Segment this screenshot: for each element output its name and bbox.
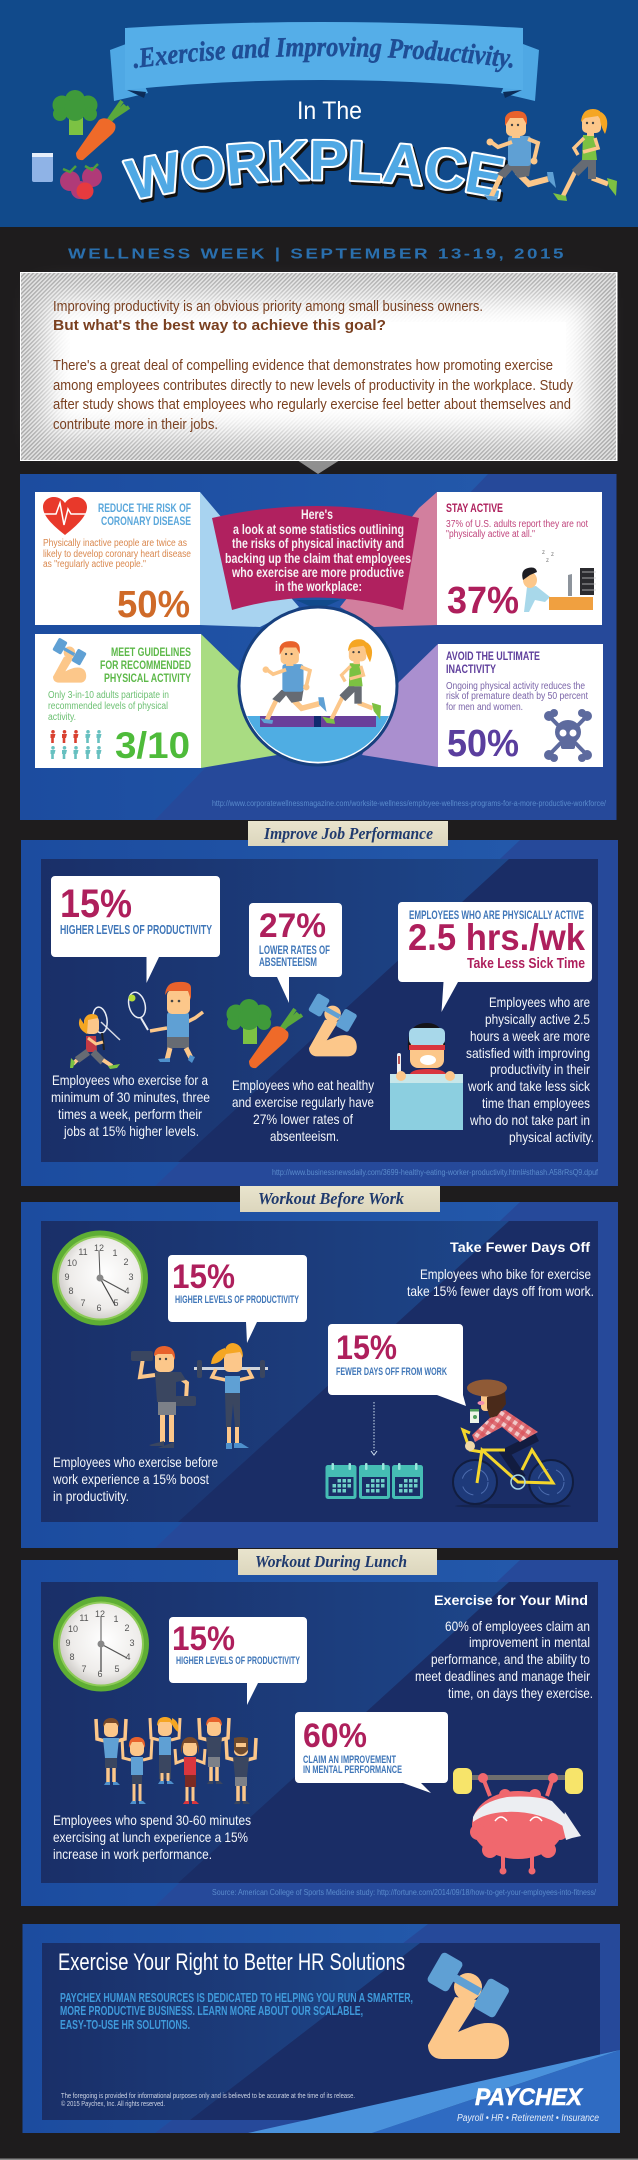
icon: brain lifting barbell — [453, 1768, 583, 1874]
text: bike: take 15% fewer days off from work. — [407, 1283, 594, 1299]
logo: Paychex: PAYCHEX — [475, 2084, 584, 2111]
icon: clock showing 4:30: 12 — [95, 1609, 105, 1619]
icon: berries — [60, 164, 102, 200]
text: during lunch: exercising at lunch experience a 15% — [53, 1829, 248, 1845]
source link: Source: American College of Sports Medicine study: http://fortune.com/2014/09/18/how-to-get-your-employees-into-fitness/ — [212, 1888, 597, 1897]
icon: tired worker at desk — [522, 550, 596, 612]
bubble: 60%: CLAIM AN IMPROVEMENT — [303, 1754, 396, 1766]
icon: clock showing 4:25: 12 — [94, 1243, 104, 1253]
icon: clock showing 4:25: 11 — [78, 1247, 88, 1257]
card: coronary disease: 50% — [117, 584, 190, 626]
intro text — [53, 299, 574, 433]
icon: clock showing 4:25: 5 — [113, 1298, 119, 1308]
card: ultimate inactivity: Ongoing physical activity reduces the — [446, 681, 585, 692]
header band — [0, 0, 638, 227]
bubble: 15% productivity: HIGHER LEVELS OF PRODUCTIVITY — [176, 1655, 300, 1667]
icon: clock showing 4:25: 2 — [123, 1257, 129, 1267]
card: coronary disease: CORONARY DISEASE — [101, 514, 191, 528]
icon: tired worker at desk: z — [542, 550, 545, 556]
banner: here's a look: in the workplace: — [275, 578, 362, 594]
icon: clock showing 4:30: 1 — [113, 1614, 119, 1624]
icon: carrot — [249, 1009, 302, 1068]
card: coronary disease: REDUCE THE RISK OF — [98, 501, 191, 515]
icon: group of six exercisers — [96, 1717, 256, 1804]
text: 27% absenteeism: Employees who eat healthy — [232, 1077, 374, 1093]
card: coronary disease — [35, 492, 200, 626]
card: meet guidelines: activity. — [48, 712, 76, 723]
icon: glass of water — [32, 153, 53, 182]
bubble: 27%: 27% — [259, 907, 326, 945]
card: ultimate inactivity: for men and women. — [446, 702, 523, 713]
text: before work: in productivity. — [53, 1488, 129, 1504]
text: during lunch — [53, 1812, 251, 1862]
text: sick time — [466, 994, 594, 1145]
panel: statistics — [20, 474, 616, 820]
bubble: 15% — [51, 876, 220, 983]
text: 15% productivity: Employees who exercise for a — [52, 1072, 208, 1088]
card: meet guidelines: FOR RECOMMENDED — [100, 658, 191, 672]
icon: clock showing 4:25: 3 — [128, 1272, 134, 1282]
source link: http://www.businessnewsdaily.com/3699-healthy-eating-worker-productivity.html#sthash.A58rRsQ9.dpuf — [272, 1168, 599, 1177]
bubble: 27% — [249, 903, 342, 1003]
text: mind: performance, and the ability to — [431, 1651, 590, 1667]
bubble: 2.5 hrs: 2.5 hrs./wk — [408, 917, 585, 958]
text: before work: work experience a 15% boost — [52, 1471, 209, 1487]
bubble: 15% productivity — [168, 1255, 307, 1343]
card: coronary disease: as "regularly active people." — [43, 559, 146, 570]
banner: here's a look: the risks of physical inactivity and — [232, 535, 404, 551]
connector wedges — [200, 492, 438, 768]
icon: clock showing 4:30: 3 — [129, 1638, 135, 1648]
text: before work: Employees who exercise before — [53, 1454, 218, 1470]
text: bike — [407, 1266, 594, 1299]
bubble: 60%: 60% — [303, 1717, 367, 1755]
text: during lunch: increase in work performance. — [53, 1846, 212, 1862]
icon: running woman — [553, 109, 617, 201]
icon: clock showing 4:25: 1 — [112, 1248, 118, 1258]
text: sick time: time than employees — [482, 1095, 590, 1111]
text: sick time: who do not take part in — [469, 1112, 590, 1128]
bubble: 15% productivity — [169, 1617, 307, 1705]
section tag: improve job performance: Improve Job Performance — [263, 824, 433, 843]
icon: clock showing 4:25 — [52, 1230, 148, 1326]
logo: Paychex — [457, 2084, 599, 2124]
icon: heart — [43, 497, 87, 535]
card: ultimate inactivity: AVOID THE ULTIMATE — [446, 649, 540, 663]
icon: clock showing 4:30: 9 — [65, 1638, 71, 1648]
panel: call to action — [22, 1924, 620, 2133]
bubble: 27%: ABSENTEEISM — [259, 955, 317, 969]
icon: woman lifting barbell — [194, 1343, 268, 1449]
icon: clock showing 4:30 — [53, 1596, 149, 1692]
text: sick time: hours a week are more — [470, 1028, 590, 1044]
text: sick time: productivity in their — [490, 1061, 590, 1077]
text: sick time: Employees who are — [489, 994, 590, 1010]
card: stay active: 37% — [447, 580, 519, 622]
icon: clock showing 4:25: 4 — [124, 1286, 130, 1296]
card: meet guidelines: MEET GUIDELINES — [111, 645, 191, 659]
card: coronary disease: Physically inactive people are twice as — [43, 538, 187, 549]
arrow: dotted down — [371, 1402, 377, 1455]
icon: clock showing 4:30: 10 — [68, 1624, 78, 1634]
logo: Paychex: Payroll • HR • Retirement • Insurance — [457, 2113, 599, 2124]
wedge: bottom right — [248, 2050, 620, 2133]
icon: clock showing 4:25: 7 — [80, 1298, 86, 1308]
intro text: after study shows that employees who regularly exercise feel better about themselves and — [53, 397, 571, 413]
bubble: 15% productivity: HIGHER LEVELS OF PRODUCTIVITY — [175, 1294, 299, 1306]
body text: MORE PRODUCTIVE BUSINESS. LEARN MORE ABOUT OUR SCALABLE, — [60, 2003, 363, 2018]
text: mind: 60% of employees claim an — [445, 1618, 590, 1634]
bubble: 15% fewer days: 15% — [336, 1329, 397, 1367]
text: sick time: work and take less sick — [467, 1078, 591, 1094]
icon: arm with dumbbell — [426, 1951, 510, 2059]
card: meet guidelines: PHYSICAL ACTIVITY — [104, 671, 191, 685]
icon: skull and crossbones — [544, 709, 592, 762]
icon: clock showing 4:30: 4 — [125, 1652, 131, 1662]
card: meet guidelines — [35, 634, 201, 768]
body text — [60, 1990, 413, 2032]
title: WORKPLACE: WORKPLACE — [134, 142, 508, 203]
panel: workout before work — [21, 1202, 618, 1548]
icon: clock showing 4:25: 9 — [64, 1272, 70, 1282]
bubble: 15%: 15% — [60, 882, 132, 926]
subtitle: In The: In The — [297, 97, 362, 125]
text: 27% absenteeism: 27% lower rates of — [253, 1111, 353, 1127]
bottom edge — [0, 2158, 638, 2160]
intro text: But what's the best way to achieve this goal? — [53, 318, 386, 334]
card: stay active: STAY ACTIVE — [446, 501, 503, 515]
icon: tired worker at desk: z — [551, 552, 554, 558]
icon: clock showing 4:30: 6 — [97, 1669, 103, 1679]
circle: runners — [239, 607, 397, 765]
icon: clock showing 4:30: 8 — [69, 1652, 75, 1662]
card: ultimate inactivity: 50% — [447, 723, 519, 765]
text: mind: time, on days they exercise. — [448, 1685, 593, 1701]
icon: running man — [484, 111, 556, 201]
ribbon banner — [110, 22, 539, 101]
title: WORKPLACE: WORKPLACE — [122, 138, 506, 200]
icon: man lifting dumbbells — [131, 1346, 196, 1448]
icon: clock showing 4:30: 5 — [114, 1664, 120, 1674]
panel: introduction — [20, 272, 618, 474]
icon: cyclist — [453, 1380, 573, 1508]
text: 15% productivity: jobs at 15% higher levels. — [63, 1123, 199, 1139]
icon: carrot — [76, 101, 129, 160]
disclaimer — [61, 2093, 355, 2108]
icons: three calendars — [326, 1463, 423, 1499]
body text: PAYCHEX HUMAN RESOURCES IS DEDICATED TO HELPING YOU RUN A SMARTER, — [60, 1990, 413, 2005]
text: 27% absenteeism — [232, 1077, 374, 1144]
card: ultimate inactivity — [438, 644, 603, 767]
section tag: improve job performance — [248, 821, 448, 846]
section tag: workout before work — [240, 1186, 440, 1212]
text: 27% absenteeism: and exercise regularly have — [232, 1094, 374, 1110]
text: sick time: satisfied with improving — [466, 1045, 590, 1061]
icon: tennis players — [70, 982, 203, 1069]
section tag: workout before work: Workout Before Work — [258, 1189, 404, 1208]
heading: exercise for your mind: Exercise for Your Mind — [434, 1592, 588, 1608]
banner: here's a look: who exercise are more productive — [231, 564, 404, 580]
date heading: WELLNESS WEEK | SEPTEMBER 13-19, 2015 — [68, 246, 566, 262]
bubble: 60%: IN MENTAL PERFORMANCE — [303, 1764, 402, 1776]
text: mind — [415, 1618, 593, 1701]
icon: people pictogram 3 of 10 — [50, 730, 102, 759]
ribbon banner: .Exercise and Improving Productivity. — [134, 36, 512, 72]
icon: clock showing 4:30: 2 — [124, 1623, 130, 1633]
panel: improve job performance — [21, 840, 618, 1186]
bubble: 27%: LOWER RATES OF — [259, 943, 330, 957]
icon: clock showing 4:25: 8 — [68, 1286, 74, 1296]
icon: clock showing 4:30: 7 — [81, 1664, 87, 1674]
disclaimer: © 2015 Paychex, Inc. All rights reserved. — [61, 2100, 165, 2108]
text: bike: Employees who bike for exercise — [420, 1266, 591, 1282]
icon: arm with dumbbell — [52, 637, 87, 683]
bubble: 2.5 hrs: Take Less Sick Time — [467, 955, 585, 972]
text: mind: meet deadlines and manage their — [415, 1668, 590, 1684]
bubble: 60% — [295, 1712, 448, 1793]
icon: broccoli — [52, 90, 98, 135]
banner: here's a look: Here's — [301, 506, 333, 522]
text: sick time: physical activity. — [509, 1129, 594, 1145]
bubble: 15%: HIGHER LEVELS OF PRODUCTIVITY — [60, 922, 212, 937]
text: during lunch: Employees who spend 30-60 minutes — [53, 1812, 251, 1828]
card: meet guidelines: 3/10 — [115, 725, 190, 766]
card: ultimate inactivity: risk of premature death by 50 percent — [446, 691, 588, 702]
intro text: There's a great deal of compelling evidence that demonstrates how promoting exercise — [53, 358, 553, 374]
icon: clock showing 4:25: 6 — [96, 1303, 102, 1313]
intro text: contribute more in their jobs. — [53, 417, 218, 433]
icon: arm with dumbbell — [308, 993, 358, 1056]
text: 15% productivity — [51, 1072, 210, 1139]
bubble: 2.5 hrs — [398, 902, 592, 1012]
banner: here's a look: backing up the claim that employees — [225, 550, 411, 566]
heading: take fewer days off: Take Fewer Days Off — [450, 1239, 590, 1255]
bubble: 15% fewer days — [328, 1324, 466, 1406]
card: coronary disease: likely to develop coronary heart disease — [43, 549, 191, 560]
card: meet guidelines: recommended levels of physical — [48, 701, 168, 712]
icon: clock showing 4:25: 10 — [67, 1258, 77, 1268]
bubble: 15% fewer days: FEWER DAYS OFF FROM WORK — [336, 1366, 447, 1378]
icon: broccoli — [226, 999, 272, 1044]
card: meet guidelines: Only 3-in-10 adults participate in — [48, 690, 169, 701]
card: stay active — [437, 492, 602, 625]
text: 15% productivity: minimum of 30 minutes, three — [51, 1089, 210, 1105]
text: 27% absenteeism: absenteeism. — [270, 1128, 339, 1144]
text: 15% productivity: times a week, perform their — [58, 1106, 202, 1122]
card: stay active: "physically active at all." — [446, 529, 535, 540]
bubble: 15% productivity: 15% — [172, 1258, 235, 1296]
intro text: Improving productivity is an obvious priority among small business owners. — [53, 299, 483, 315]
banner: here's a look — [212, 506, 419, 610]
panel: workout during lunch — [21, 1560, 618, 1906]
heading: Exercise Your Right to Better HR Solutions — [58, 1949, 405, 1976]
bubble: 15% productivity: 15% — [172, 1620, 235, 1658]
icon: tired worker at desk: z — [546, 558, 549, 564]
disclaimer: The foregoing is provided for informational purposes only and is believed to be accurate at the time of its release. — [61, 2093, 355, 2100]
card: stay active: 37% of U.S. adults report they are not — [446, 519, 588, 530]
banner: here's a look: a look at some statistics outlining — [233, 521, 404, 537]
section tag: workout during lunch — [238, 1549, 437, 1575]
text: before work — [52, 1454, 218, 1504]
text: mind: improvement in mental — [469, 1634, 590, 1650]
intro text: among employees contributes directly to new levels of productivity in the workplace. Study — [53, 378, 574, 394]
body text: EASY-TO-USE HR SOLUTIONS. — [60, 2017, 190, 2032]
section tag: workout during lunch: Workout During Lunch — [255, 1552, 407, 1571]
text: sick time: physically active 2.5 — [485, 1011, 590, 1027]
icon: clock showing 4:30: 11 — [79, 1613, 89, 1623]
card: ultimate inactivity: INACTIVITY — [446, 662, 496, 676]
icon: sick employee in bed — [390, 1023, 463, 1130]
